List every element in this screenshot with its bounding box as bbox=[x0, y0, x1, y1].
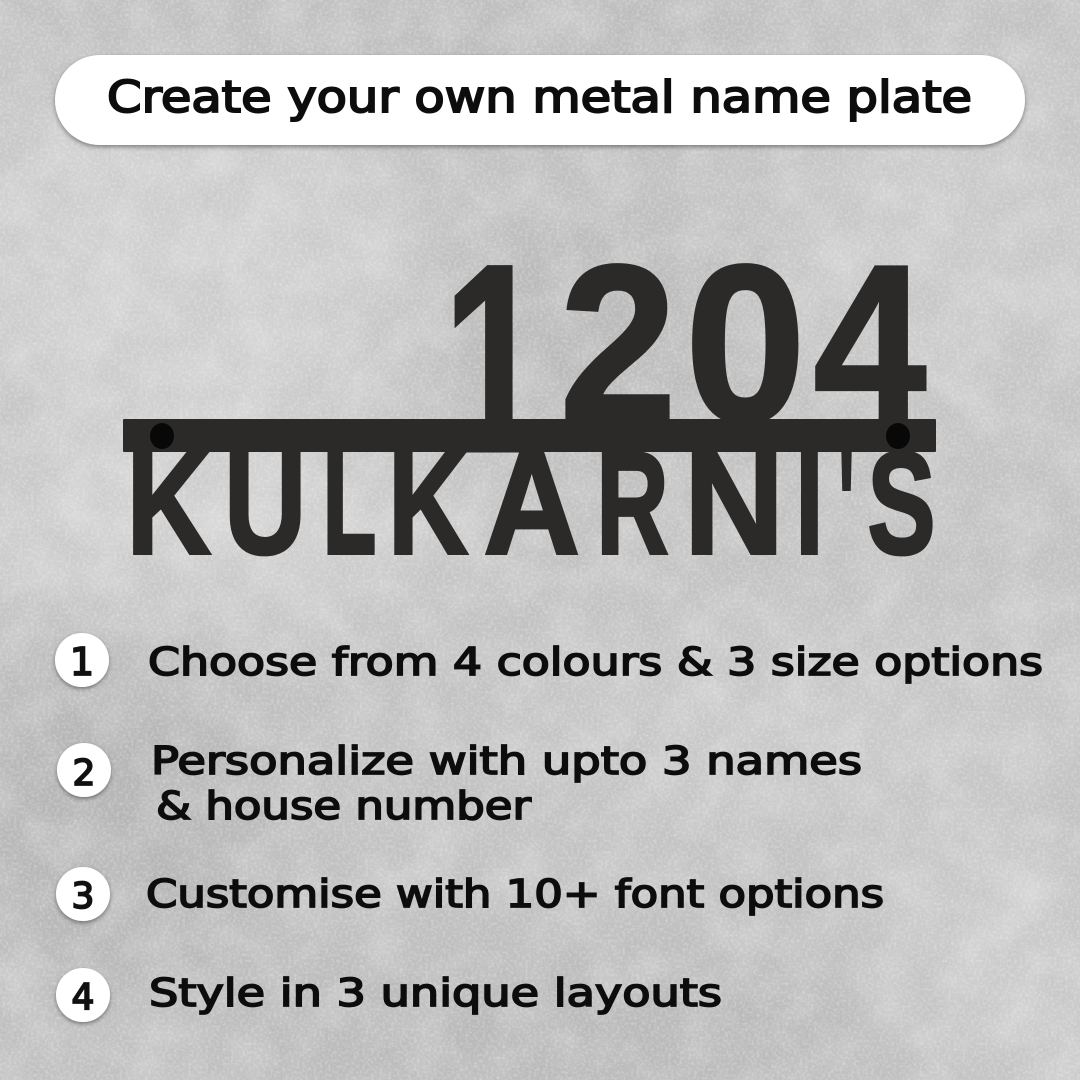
house number: 1 bbox=[443, 209, 546, 508]
family name: I bbox=[795, 421, 824, 585]
step 2 text bbox=[151, 739, 862, 828]
house number: 4 bbox=[814, 220, 926, 469]
badge 2 bbox=[57, 743, 111, 797]
step 3 bbox=[56, 867, 884, 921]
mounting bar bbox=[123, 419, 936, 452]
house number: 2 bbox=[560, 219, 677, 469]
step 2 text: & house number bbox=[156, 784, 531, 828]
family name: K bbox=[388, 423, 468, 585]
family name: A bbox=[484, 421, 580, 585]
family name bbox=[126, 421, 936, 586]
badge 4 bbox=[56, 968, 110, 1022]
badge 3 bbox=[56, 867, 110, 921]
house number: 0 bbox=[685, 218, 806, 469]
badge 3: 3 bbox=[72, 876, 94, 917]
family name: ' bbox=[838, 422, 854, 586]
right screw bbox=[886, 423, 910, 449]
title text: Create your own metal name plate bbox=[107, 72, 972, 123]
badge 1: 1 bbox=[70, 640, 94, 684]
house number bbox=[443, 209, 926, 508]
badge 4: 4 bbox=[72, 977, 94, 1018]
family name: N bbox=[684, 422, 784, 585]
badge 1 bbox=[55, 633, 109, 687]
badge 2: 2 bbox=[73, 753, 95, 794]
step 3 text: Customise with 10+ font options bbox=[146, 872, 884, 916]
step 2 text: Personalize with upto 3 names bbox=[151, 739, 862, 783]
metal name plate bbox=[123, 209, 936, 586]
family name: U bbox=[224, 421, 306, 585]
title pill bbox=[55, 55, 1025, 145]
step 2 bbox=[57, 739, 862, 828]
family name: S bbox=[867, 421, 936, 585]
step 1 text: Choose from 4 colours & 3 size options bbox=[148, 640, 1043, 684]
family name: R bbox=[596, 422, 669, 585]
step 4 text: Style in 3 unique layouts bbox=[149, 971, 722, 1015]
step 1 bbox=[55, 633, 1043, 687]
left screw bbox=[150, 423, 174, 449]
family name: L bbox=[323, 421, 376, 584]
family name: K bbox=[126, 422, 211, 586]
step 4 bbox=[56, 968, 722, 1022]
